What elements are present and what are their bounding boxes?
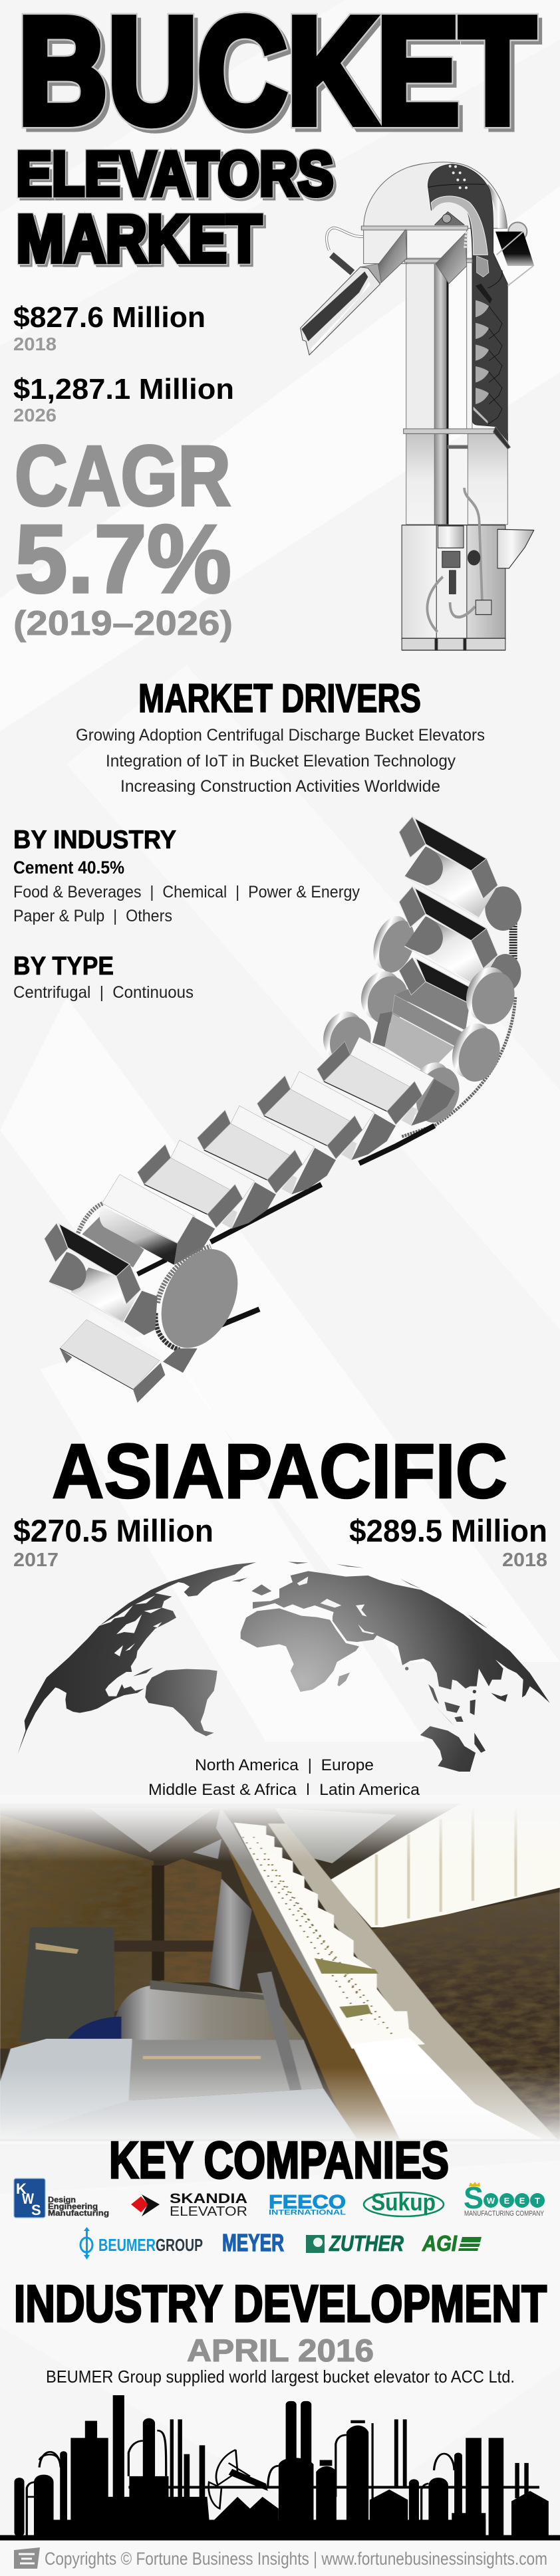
- photo: bucket elevator in shed: [0, 1795, 560, 2144]
- logo: KWS: W: [22, 2190, 34, 2207]
- title: [16, 0, 539, 279]
- logo: AGI: AGI: [422, 2231, 458, 2256]
- by type: Centrifugal | Continuous: [13, 983, 194, 1002]
- market drivers heading: MARKET DRIVERS: [138, 676, 421, 721]
- conveyor lower section: [45, 1106, 336, 1403]
- third bucket tray: [372, 957, 472, 1074]
- market size 2018: [13, 301, 206, 354]
- development date: APRIL 2016: [187, 2333, 374, 2368]
- logo: KWS: [14, 2178, 109, 2218]
- logo: Sweet Manufacturing: E: [504, 2196, 510, 2206]
- inland seas: [297, 1577, 374, 1634]
- logo: KWS: Engineering: [48, 2203, 98, 2211]
- elevator bearing: [434, 211, 464, 225]
- elevator shafts: [406, 258, 507, 525]
- top buckets: [399, 816, 497, 989]
- region value 2018: $289.5 Million: [349, 1513, 547, 1548]
- logo: Zuther: [306, 2231, 404, 2256]
- CAGR: 5.7%: [15, 505, 231, 613]
- development description: BEUMER Group supplied world largest bucket elevator to ACC Ltd.: [46, 2367, 515, 2387]
- upper belt: [359, 915, 515, 1163]
- title: ELEVATORS: ELEVATORS: [16, 138, 334, 209]
- CAGR: CAGR: [15, 429, 231, 524]
- by industry: Food & Beverages | Chemical | Power & Energy: [13, 883, 360, 901]
- lower bucket: [45, 1223, 158, 1335]
- market size 2026: 2026: [13, 405, 57, 425]
- elevator casing cutaway: [428, 164, 507, 441]
- elevator inner strand: [465, 231, 467, 248]
- world map: [18, 1562, 550, 1772]
- madagascar: [337, 1673, 350, 1687]
- logo: Beumer Group: BEUMER: [98, 2235, 156, 2255]
- elevator head section: [361, 226, 510, 449]
- logo: Skandia Elevator: ELEVATOR: [170, 2204, 247, 2219]
- logo: Meyer: MEYER: [222, 2229, 284, 2256]
- by industry: BY INDUSTRY: [13, 826, 176, 854]
- logo: KWS: K: [16, 2180, 27, 2197]
- logo: Sweet Manufacturing: E: [519, 2196, 525, 2206]
- logo: Feeco International: INTERNATIONAL: [269, 2208, 346, 2216]
- logo: Sweet Manufacturing: W: [487, 2196, 495, 2206]
- conveyor middle buckets: [257, 1037, 456, 1160]
- logo: Skandia Elevator: [131, 2191, 247, 2219]
- logo: Sukup: Sukup: [371, 2188, 436, 2216]
- back pulleys: [316, 886, 521, 1070]
- market drivers list: Growing Adoption Centrifugal Discharge Bucket Elevators: [76, 726, 485, 745]
- logo: Sweet Manufacturing: S: [464, 2180, 484, 2215]
- market drivers list: Integration of IoT in Bucket Elevation Technology: [106, 752, 456, 770]
- market drivers list: Increasing Construction Activities Worldwide: [120, 777, 440, 796]
- logo: Skandia Elevator: SKANDIA: [170, 2191, 247, 2206]
- region value 2017: $270.5 Million: [13, 1513, 213, 1548]
- north america: [18, 1562, 256, 1754]
- front pulleys: [402, 961, 523, 1129]
- logo: KWS: S: [31, 2202, 41, 2218]
- elevator right spout: [495, 222, 534, 286]
- logo: Sweet Manufacturing: T: [535, 2196, 540, 2206]
- bottom unit: [60, 1310, 198, 1403]
- by industry: Paper & Pulp | Others: [13, 907, 172, 925]
- pulley: [146, 1237, 253, 1360]
- logo: Beumer Group: GROUP: [156, 2235, 203, 2255]
- region heading: ASIAPACIFIC: [52, 1428, 507, 1514]
- title: ELEVATORS: ELEVATORS: [16, 138, 334, 209]
- australia: [420, 1726, 476, 1772]
- market size 2026: [13, 373, 234, 425]
- market drivers list: [76, 726, 485, 796]
- elevator discharge chute: [301, 264, 381, 355]
- map: americas: [18, 1562, 271, 1754]
- by type: [13, 952, 194, 1002]
- lower belt: [78, 1185, 321, 1325]
- logo: KWS: Manufacturing: [48, 2210, 109, 2218]
- straight buckets: [138, 1106, 336, 1229]
- by type: BY TYPE: [13, 952, 114, 981]
- logo: Feeco International: FEECO: [269, 2192, 346, 2213]
- logo: Beumer Group: [80, 2227, 203, 2260]
- arctic islands: [288, 1562, 488, 1629]
- other regions: Middle East & Africa | Latin America: [148, 1781, 420, 1799]
- back panel: [82, 1217, 144, 1268]
- refinery skyline: [0, 2395, 560, 2540]
- elevator upper section: [301, 162, 534, 525]
- CAGR: (2019–2026): [13, 604, 233, 643]
- other regions: [148, 1756, 420, 1799]
- by industry: Cement 40.5%: [13, 858, 124, 878]
- title: MARKET: MARKET: [19, 204, 264, 279]
- logo: KWS: Design: [48, 2196, 76, 2204]
- logo: Zuther: ZUTHER: [329, 2231, 404, 2256]
- title: MARKET: MARKET: [16, 202, 262, 277]
- illustration: bucket conveyor belt: [45, 816, 523, 1403]
- market size 2018: 2018: [13, 334, 57, 354]
- region value 2018: [349, 1513, 547, 1571]
- illustration: bucket elevator: [301, 162, 534, 650]
- hudson bay and lakes: [98, 1595, 162, 1657]
- market size 2026: $1,287.1 Million: [13, 373, 234, 406]
- eurasia: [253, 1571, 550, 1703]
- CAGR: [13, 429, 233, 643]
- conveyor upper section: [316, 816, 523, 1163]
- elevator buckets: [474, 256, 502, 424]
- region value 2017: [13, 1513, 213, 1571]
- footer logo: [14, 2547, 40, 2569]
- africa: [241, 1608, 359, 1692]
- title: ELEVATORS: ELEVATORS: [19, 141, 336, 211]
- south america: [145, 1669, 217, 1736]
- region value 2017: 2017: [13, 1550, 59, 1571]
- by industry: [13, 826, 360, 925]
- market size 2018: $827.6 Million: [13, 301, 206, 334]
- large bucket: [100, 1175, 215, 1265]
- logo: Sweet Manufacturing: [464, 2180, 545, 2218]
- key companies heading: KEY COMPANIES: [109, 2131, 449, 2189]
- region value 2018: 2018: [502, 1550, 547, 1571]
- logo: AGI: [422, 2231, 482, 2256]
- asia islands: [428, 1684, 507, 1753]
- caribbean: [126, 1667, 153, 1680]
- iceland and britain: [231, 1578, 271, 1595]
- elevator hood: [364, 162, 507, 228]
- title: MARKET: MARKET: [16, 202, 262, 277]
- footer: [14, 2547, 547, 2569]
- other regions: North America | Europe: [195, 1756, 374, 1774]
- map: europe africa asia: [241, 1562, 550, 1772]
- elevator hose: [327, 228, 363, 273]
- elevator boot: [402, 488, 534, 650]
